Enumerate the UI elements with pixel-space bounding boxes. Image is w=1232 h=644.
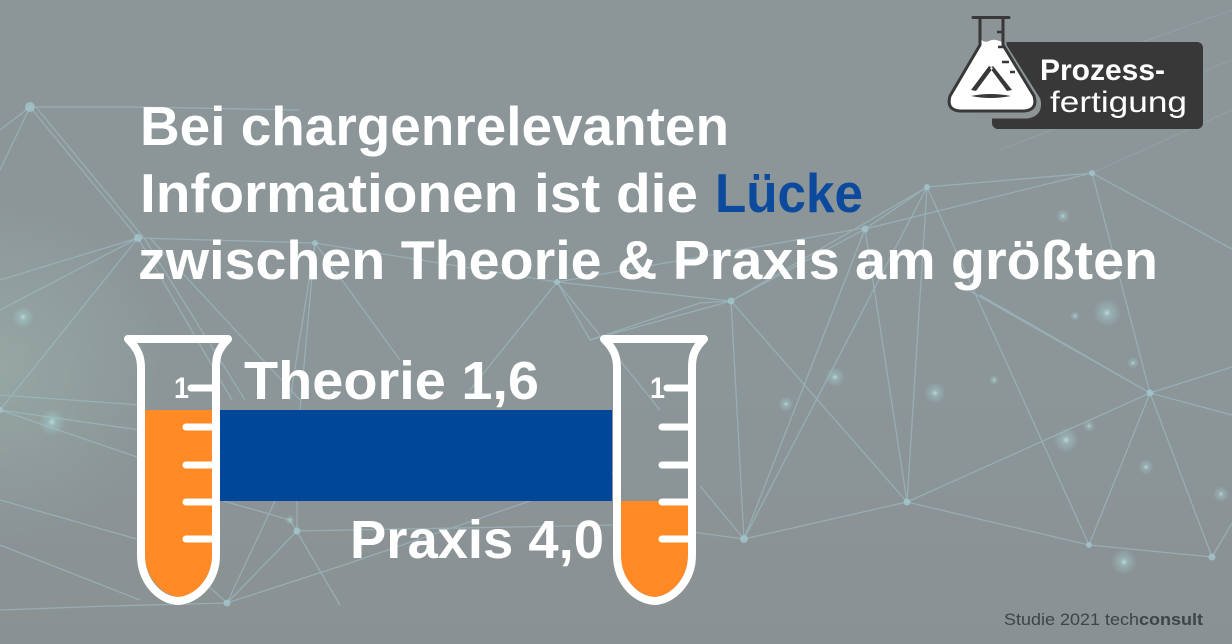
title: Lücke <box>715 162 863 224</box>
title <box>138 95 1158 291</box>
title: Informationen ist die <box>140 162 698 224</box>
label: Praxis: Praxis 4,0 <box>350 510 604 570</box>
title: Bei chargenrelevanten <box>140 95 729 157</box>
label: Theorie: Theorie 1,6 <box>244 351 539 411</box>
test tube: Theorie <box>128 339 228 601</box>
scale ticks <box>662 388 692 539</box>
scale ticks <box>186 388 216 539</box>
tube outline <box>128 339 228 601</box>
scale number: 1 <box>174 372 189 405</box>
badge panel <box>992 42 1203 129</box>
tube fill <box>620 501 688 597</box>
badge: Prozessfertigung <box>949 18 1203 129</box>
source note: Studie 2021 tech consult <box>1004 610 1203 629</box>
tube fill <box>145 410 212 597</box>
gap bar <box>220 410 612 501</box>
tube outline <box>604 339 704 601</box>
badge text: Prozess- <box>1040 54 1165 87</box>
badge: Prozessfertigung: fertigung <box>1050 86 1187 119</box>
title: zwischen Theorie & Praxis am größten <box>138 229 1158 291</box>
icon: flask <box>949 18 1038 115</box>
scale number: 1 <box>650 372 665 405</box>
test tube: Praxis <box>604 339 704 601</box>
